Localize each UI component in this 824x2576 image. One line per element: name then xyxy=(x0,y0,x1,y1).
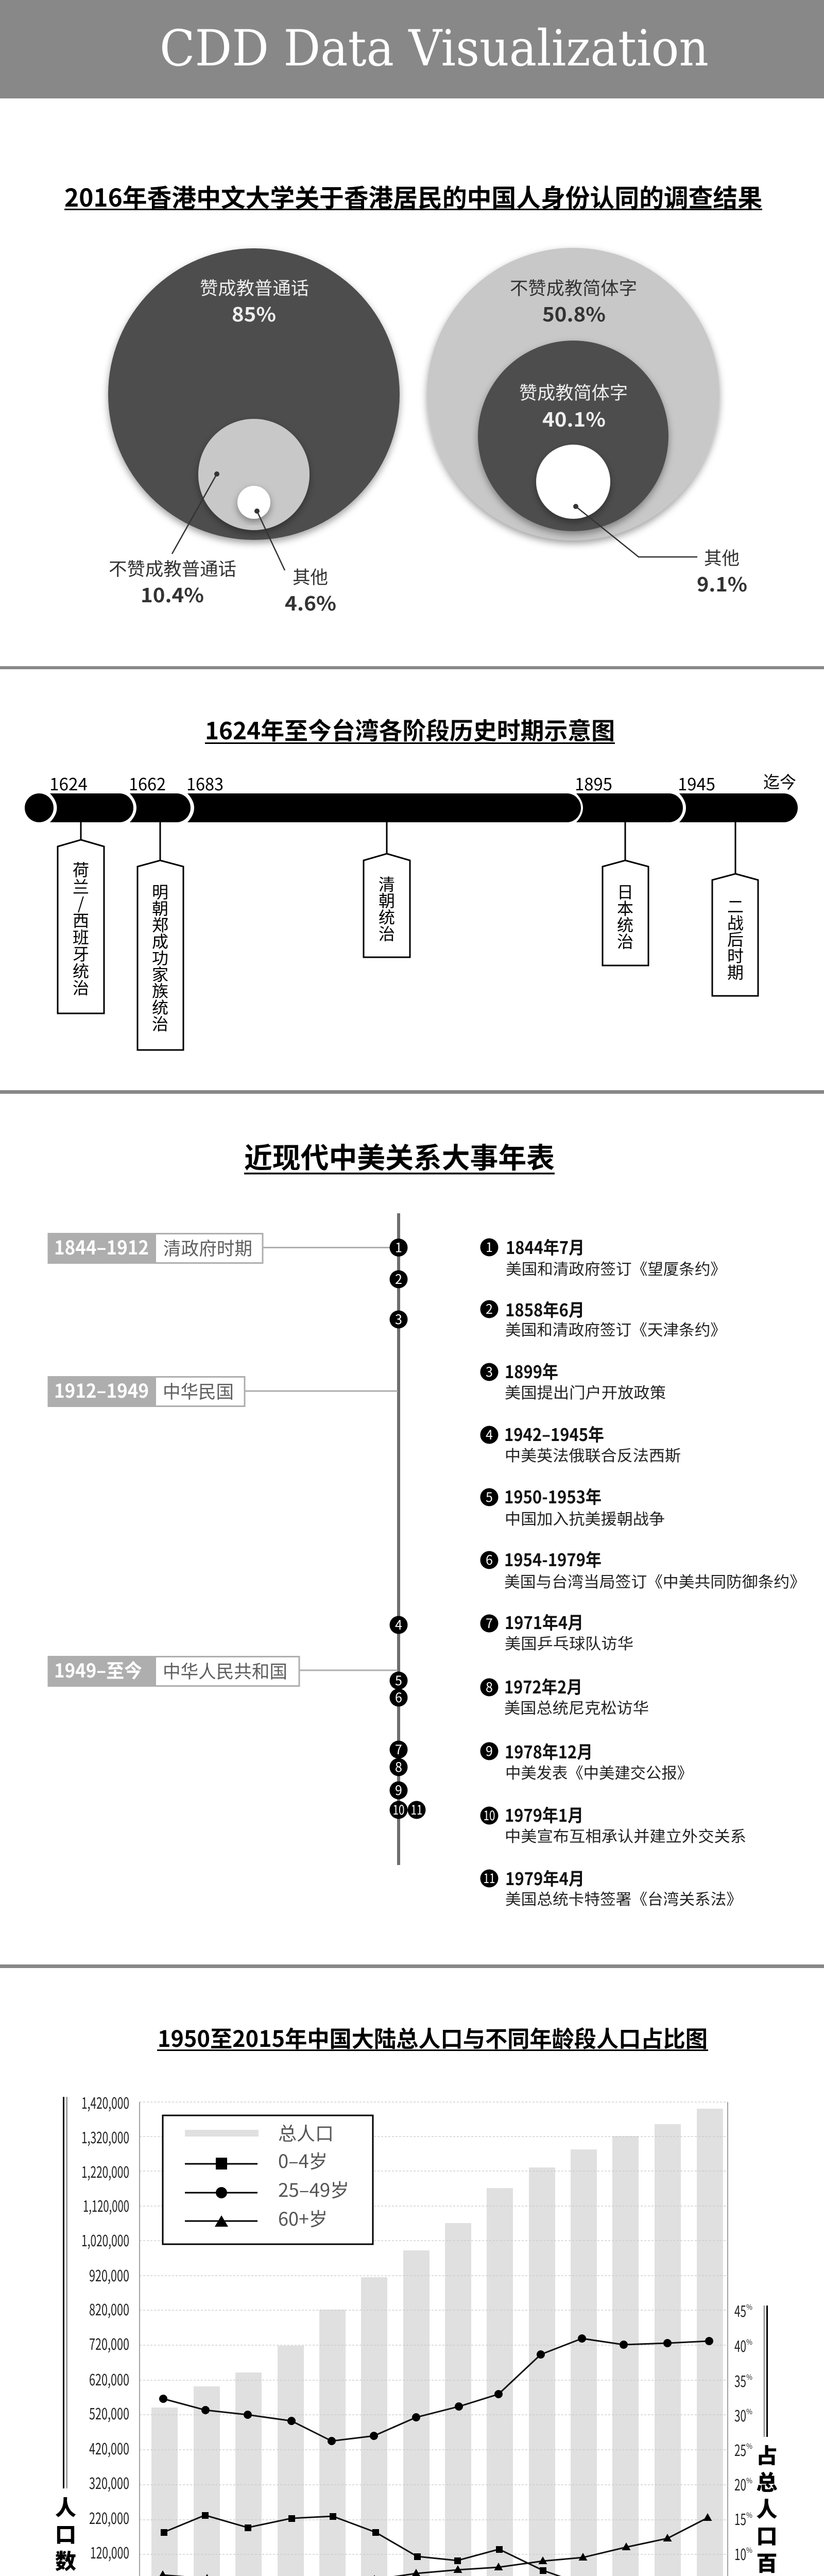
event 5: 1950-1953年 xyxy=(504,1483,602,1509)
right axis tick labels: % xyxy=(746,2406,752,2417)
event 6: 美国与台湾当局签订《中美共同防御条约》 xyxy=(504,1569,805,1592)
tag: Qing rule: 清朝统治 xyxy=(375,876,399,942)
timeline markers: 4 xyxy=(395,1615,402,1634)
year labels: 1945 xyxy=(678,771,715,795)
line series: 0-4 xyxy=(161,2512,713,2576)
panel: Taiwan history timeline xyxy=(25,713,798,1050)
event 2: 1858年6月 xyxy=(505,1296,585,1321)
event 7 xyxy=(480,1609,633,1654)
right axis tick labels: % xyxy=(746,2441,752,2451)
timeline markers: 10 xyxy=(392,1800,405,1819)
event 8: 8 xyxy=(486,1677,493,1696)
event 11: 1979年4月 xyxy=(505,1865,585,1890)
event 5: 5 xyxy=(486,1487,493,1506)
chart: simplified characters nested circles: 不赞成教简体字 xyxy=(510,274,637,300)
legend xyxy=(163,2115,373,2244)
tag: Japanese rule: 日本统治 xyxy=(613,884,637,950)
tag: Ming Zheng rule xyxy=(138,822,183,1050)
event 3: 3 xyxy=(486,1362,493,1381)
year labels: 1624 xyxy=(49,771,88,795)
legend: 25–49岁 xyxy=(278,2176,349,2202)
heading: Sino-US: 近现代中美关系大事年表 xyxy=(244,1135,555,1176)
right axis tick labels: 30 xyxy=(734,2403,746,2426)
heading: population: 1950至2015年中国大陆总人口与不同年龄段人口占比图 xyxy=(158,2021,708,2054)
year labels: 1662 xyxy=(129,771,166,795)
year labels: 迄今 xyxy=(763,769,796,793)
tag: Ming Zheng rule: 明朝郑成功家族统治 xyxy=(148,884,172,1032)
timeline markers: 8 xyxy=(395,1757,402,1776)
legend: 60+岁 xyxy=(278,2205,328,2231)
right axis tick labels: % xyxy=(746,2510,752,2520)
callout: oppose Putonghua: 不赞成教普通话 xyxy=(109,555,236,581)
event 6: 1954-1979年 xyxy=(504,1546,602,1571)
event 11 xyxy=(480,1865,742,1909)
left axis tick labels: 320,000 xyxy=(89,2471,129,2494)
tag: Japanese rule xyxy=(603,822,648,965)
chart: Putonghua nested circles: 赞成教普通话 xyxy=(200,274,309,300)
right axis tick labels: % xyxy=(746,2337,752,2347)
event 6: 6 xyxy=(486,1550,493,1569)
event 4: 中美英法俄联合反法西斯 xyxy=(505,1443,681,1466)
event 8 xyxy=(480,1673,649,1718)
left axis tick labels: 1,020,000 xyxy=(81,2228,129,2251)
event 3 xyxy=(480,1358,666,1403)
timeline markers: 1 xyxy=(395,1238,402,1256)
right axis tick labels: % xyxy=(746,2302,752,2312)
line series: 25-49 xyxy=(159,2334,713,2445)
event 1: 1 xyxy=(486,1238,493,1256)
left axis tick labels: 420,000 xyxy=(89,2436,129,2459)
panel: Hong Kong survey xyxy=(64,178,762,616)
right axis tick labels: 35 xyxy=(734,2369,746,2392)
timeline markers: 9 xyxy=(395,1781,402,1799)
event 5: 中国加入抗美援朝战争 xyxy=(505,1506,665,1529)
event 4: 4 xyxy=(486,1425,493,1444)
heading: Taiwan periods: 1624年至今台湾各阶段历史时期示意图 xyxy=(205,713,615,747)
event 7: 7 xyxy=(486,1614,493,1632)
right axis title: 占 xyxy=(756,2438,778,2469)
timeline markers: 3 xyxy=(395,1310,402,1328)
left axis tick labels: 620,000 xyxy=(89,2367,129,2390)
event 2: 2 xyxy=(486,1299,493,1318)
event 7: 1971年4月 xyxy=(505,1609,583,1634)
year labels: 1895 xyxy=(575,771,612,795)
panel: Sino-US timeline xyxy=(48,1135,805,1909)
chart: simplified characters nested circles: 50.8% xyxy=(542,299,606,327)
legend: 0–4岁 xyxy=(278,2147,328,2174)
event 9: 1978年12月 xyxy=(505,1738,593,1764)
event 1 xyxy=(480,1234,726,1279)
tag: Dutch/Spanish rule: 荷兰/西班牙统治 xyxy=(69,861,93,996)
event 10 xyxy=(480,1802,746,1846)
right axis tick labels: 40 xyxy=(734,2334,746,2357)
timeline bar xyxy=(25,793,798,822)
right axis tick labels xyxy=(734,2299,752,2576)
period: PRC xyxy=(48,1655,398,1686)
period: ROC xyxy=(48,1376,398,1407)
header banner xyxy=(0,0,824,98)
right axis title: 口 xyxy=(756,2519,778,2550)
event 6 xyxy=(480,1546,805,1592)
bar series: total population xyxy=(151,2109,723,2576)
left axis tick labels: 1,420,000 xyxy=(81,2091,129,2113)
right axis title: 总 xyxy=(756,2465,778,2496)
event 9: 9 xyxy=(486,1741,493,1760)
chart axes xyxy=(140,2102,728,2576)
left axis tick labels: 820,000 xyxy=(89,2297,129,2320)
right axis tick labels: 15 xyxy=(734,2507,746,2530)
line series: 60+ xyxy=(159,2513,712,2576)
chart: simplified characters nested circles: 40.1% xyxy=(542,404,606,432)
event 10: 中美宣布互相承认并建立外交关系 xyxy=(505,1824,746,1846)
event 11: 11 xyxy=(483,1869,495,1887)
event 5 xyxy=(480,1483,665,1529)
page title: CDD Data Visualization xyxy=(160,20,709,77)
period: Qing xyxy=(48,1232,398,1264)
period: Qing: 清政府时期 xyxy=(163,1234,252,1261)
left axis title: 人 xyxy=(55,2490,76,2521)
right axis title xyxy=(756,2306,778,2576)
chart: simplified characters nested circles: 赞成教简体字 xyxy=(519,379,628,405)
event 4 xyxy=(480,1421,681,1466)
event 2 xyxy=(480,1296,726,1340)
timeline markers: 6 xyxy=(395,1688,402,1706)
legend: 总人口 xyxy=(278,2119,334,2146)
callout: oppose Putonghua: 10.4% xyxy=(141,580,204,608)
right axis tick labels: 25 xyxy=(734,2438,746,2461)
callout: other 4.6%: 4.6% xyxy=(285,588,336,616)
panel: population chart xyxy=(47,2021,778,2576)
event 8: 1972年2月 xyxy=(504,1673,582,1699)
right axis title: 人 xyxy=(756,2492,778,2523)
timeline markers: 5 xyxy=(395,1671,402,1689)
left axis tick labels xyxy=(81,2091,129,2576)
left axis tick labels: 720,000 xyxy=(89,2332,129,2354)
left axis tick labels: 1,220,000 xyxy=(81,2160,129,2182)
callout: other 9.1%: 9.1% xyxy=(697,569,747,597)
left axis title: 口 xyxy=(55,2517,76,2548)
left axis title: 数 xyxy=(55,2544,76,2575)
period: Qing: 1844–1912 xyxy=(54,1232,149,1260)
right axis tick labels: 45 xyxy=(734,2299,746,2321)
right axis tick labels: % xyxy=(746,2476,752,2486)
timeline markers: 2 xyxy=(395,1269,402,1288)
event 8: 美国总统尼克松访华 xyxy=(504,1696,649,1718)
period: PRC: 1949–至今 xyxy=(54,1655,142,1683)
period: ROC: 中华民国 xyxy=(163,1378,234,1404)
chart: Putonghua nested circles xyxy=(108,248,400,540)
event 11: 美国总统卡特签署《台湾关系法》 xyxy=(505,1887,742,1909)
event 1: 美国和清政府签订《望厦条约》 xyxy=(506,1257,726,1279)
timeline axis xyxy=(397,1213,400,1865)
timeline markers: 7 xyxy=(395,1740,402,1758)
tag: Qing rule xyxy=(364,822,410,957)
event 9 xyxy=(480,1738,693,1783)
event 10: 10 xyxy=(483,1806,495,1824)
tag: post-war xyxy=(712,822,758,996)
callout: other 9.1% xyxy=(573,504,747,597)
left axis tick labels: 520,000 xyxy=(89,2401,129,2424)
event 2: 美国和清政府签订《天津条约》 xyxy=(505,1317,726,1340)
timeline markers: 11 xyxy=(411,1800,422,1819)
event 10: 1979年1月 xyxy=(505,1802,583,1827)
left axis tick labels: 220,000 xyxy=(89,2506,129,2529)
year labels: 1683 xyxy=(186,771,224,795)
event 7: 美国乒乓球队访华 xyxy=(505,1631,633,1654)
chart: Putonghua nested circles: 85% xyxy=(232,299,276,327)
tag: post-war: 二战后时期 xyxy=(724,898,747,980)
left axis tick labels: 920,000 xyxy=(89,2263,129,2286)
callout: other 9.1%: 其他 xyxy=(704,544,740,570)
left axis tick labels: 120,000 xyxy=(90,2540,129,2563)
heading: survey: 2016年香港中文大学关于香港居民的中国人身份认同的调查结果 xyxy=(64,178,762,214)
event 9: 中美发表《中美建交公报》 xyxy=(505,1760,693,1783)
callout: other 4.6% xyxy=(254,509,336,616)
event 3: 1899年 xyxy=(505,1358,558,1383)
right axis tick labels: 10 xyxy=(734,2542,746,2565)
callout: oppose Putonghua xyxy=(109,471,236,608)
event 3: 美国提出门户开放政策 xyxy=(505,1380,666,1403)
event 4: 1942–1945年 xyxy=(504,1421,604,1446)
callout: other 4.6%: 其他 xyxy=(293,563,328,589)
event 1: 1844年7月 xyxy=(506,1234,585,1259)
period: ROC: 1912–1949 xyxy=(54,1376,149,1403)
left axis tick labels: 1,120,000 xyxy=(83,2194,129,2216)
year labels xyxy=(49,769,796,795)
right axis tick labels: % xyxy=(746,2545,752,2555)
left axis tick labels: 1,320,000 xyxy=(81,2125,129,2148)
period: PRC: 中华人民共和国 xyxy=(163,1657,287,1684)
timeline markers xyxy=(389,1238,425,1819)
right axis tick labels: 20 xyxy=(734,2472,746,2495)
tag: Dutch/Spanish rule xyxy=(58,822,104,1013)
chart: simplified characters nested circles xyxy=(427,248,719,540)
left axis title xyxy=(47,2097,84,2576)
right axis tick labels: % xyxy=(746,2372,752,2382)
